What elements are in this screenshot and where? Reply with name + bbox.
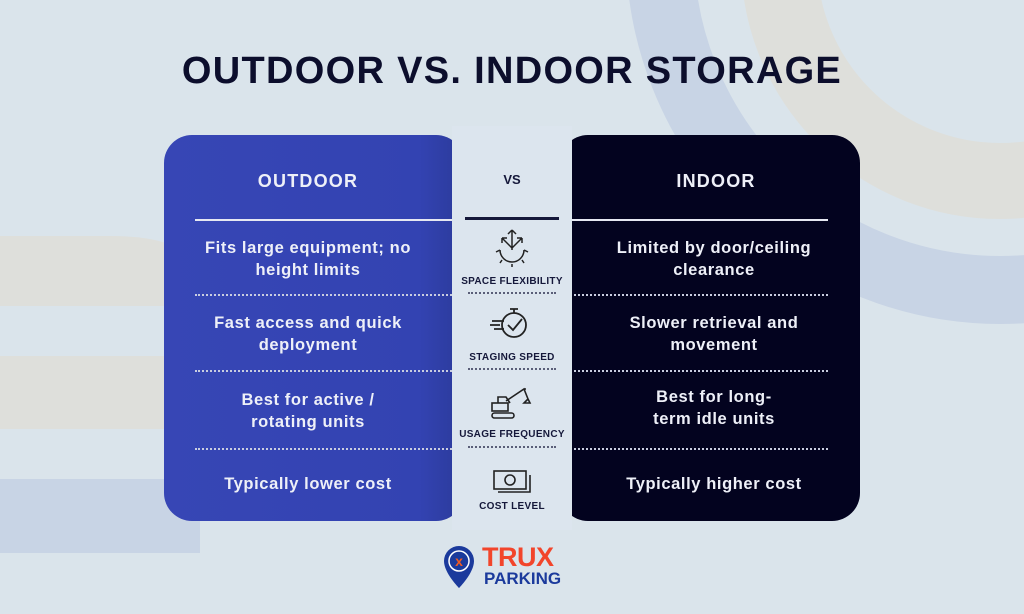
indoor rows: Limited by door/ceiling [617,239,811,257]
text: deployment [259,336,357,354]
text: Fast access and quick [214,314,402,332]
icon: gear arrows [496,230,528,267]
text: term idle units [653,410,775,428]
label: staging speed: STAGING SPEED [469,352,555,363]
text: Typically lower cost [224,475,392,493]
heading: indoor: INDOOR [676,171,756,191]
heading: vs: VS [503,172,521,187]
label: space flexibility: SPACE FLEXIBILITY [461,276,563,287]
indoor rows: clearance [673,261,755,279]
heading: outdoor: OUTDOOR [258,171,358,191]
text: movement [670,336,758,354]
logo: x [455,553,463,569]
text: Slower retrieval and [630,314,798,332]
indoor rows [617,239,811,279]
text: Best for long- [656,388,772,406]
label: cost level: COST LEVEL [479,501,545,512]
icon: money [493,470,531,493]
center strip [452,126,572,530]
logo: TRUX [482,542,554,572]
outdoor rows: height limits [256,261,360,279]
icon: excavator [491,388,532,419]
logo [444,542,561,588]
text: Typically higher cost [626,475,802,493]
panel: indoor [560,135,860,521]
text: rotating units [251,413,365,431]
panel: outdoor [164,135,464,521]
text: Best for active / [241,391,375,409]
title: OUTDOOR VS. INDOOR STORAGE [182,50,842,92]
outdoor rows: Fits large equipment; no [205,239,411,257]
label: usage frequency: USAGE FREQUENCY [459,429,565,440]
icon: stopwatch [490,308,527,338]
outdoor rows [205,239,411,279]
logo: PARKING [484,569,561,588]
